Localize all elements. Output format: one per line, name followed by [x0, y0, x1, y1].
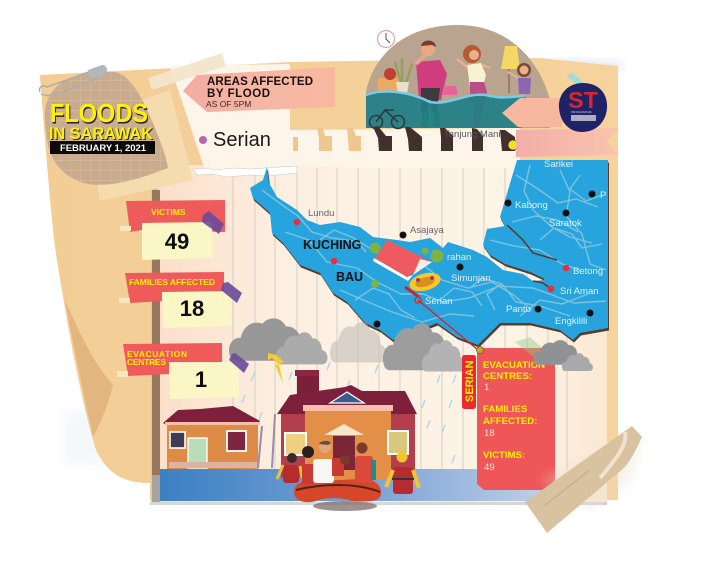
- map labels: Engkilili: [555, 316, 587, 327]
- map labels: Kabong: [515, 200, 548, 211]
- yellow sign: [508, 140, 518, 150]
- tape across top: [148, 53, 226, 90]
- icon: ST logo: [559, 72, 607, 132]
- banner: areas affected: AREAS AFFECTED: [207, 76, 313, 88]
- map of flooded region: BAU: [336, 270, 363, 284]
- bicycle: [370, 110, 404, 128]
- soft page shadows: [62, 60, 622, 470]
- map labels: Sri Aman: [560, 286, 599, 297]
- leader line to Serian card: [418, 300, 478, 350]
- stat: families affected: 18: [180, 296, 204, 321]
- stat: families affected: FAMILIES AFFECTED: [129, 277, 215, 287]
- map labels: Serian: [425, 296, 452, 307]
- map labels: Lundu: [308, 208, 334, 219]
- rivers: [262, 165, 606, 322]
- text: evacuation centres: VICTIMS:: [483, 450, 525, 461]
- map of flooded region: [250, 159, 609, 348]
- icon: flooded hut and rescue boat: [370, 240, 444, 303]
- map labels: Asajaya: [410, 225, 445, 236]
- spiral tabs: dark: [373, 126, 515, 151]
- text: evacuation centres: 18: [484, 428, 495, 439]
- icon: ST logo: ST: [568, 87, 598, 113]
- tape: bottom right corner: [525, 426, 642, 533]
- banner: areas affected: AS OF 5PM: [206, 99, 251, 109]
- banner: areas affected: [183, 67, 335, 112]
- map labels: [308, 159, 606, 327]
- title: Floods in Sarawak: IN SARAWAK: [49, 125, 153, 143]
- title: Floods in Sarawak: [49, 98, 154, 144]
- illustration: large house: [277, 370, 417, 480]
- sticky note behind title: [85, 90, 193, 201]
- spiral tabs: tan: [293, 127, 361, 151]
- lamp: [443, 46, 520, 95]
- title tag: [45, 72, 168, 185]
- stat: victims: VICTIMS: [151, 207, 186, 217]
- map dots: [374, 190, 596, 328]
- icon: safety pin: [39, 65, 107, 96]
- cloud near card: [533, 340, 593, 371]
- child: [508, 63, 531, 94]
- flood water band: [160, 469, 555, 501]
- flood water: [366, 91, 538, 128]
- stat: families affected: [119, 272, 242, 328]
- map of flooded region: KUCHING: [303, 238, 361, 252]
- map labels: Betong: [573, 266, 603, 277]
- tag: SERIAN: [462, 355, 476, 409]
- text: evacuation centres: 1: [484, 382, 489, 393]
- stat: victims: [120, 200, 225, 260]
- plant and box: [378, 58, 412, 94]
- map labels: Pantu: [506, 304, 531, 315]
- stat: evacuation centres: [117, 343, 249, 399]
- map labels: Saratok: [549, 218, 582, 229]
- title: Floods in Sarawak: FLOODS: [51, 100, 149, 130]
- icon: ST logo: INFOGRAPHIC: [571, 110, 593, 114]
- map labels: Simunjan: [451, 273, 491, 284]
- text: evacuation centres: [483, 360, 545, 473]
- icon: gold pin: [476, 346, 484, 354]
- location: Serian: Serian: [213, 129, 271, 151]
- map labels: rahan: [447, 252, 471, 263]
- stat: victims: 49: [165, 229, 189, 254]
- illustration: small house: [163, 406, 275, 469]
- icon: lightning: [268, 353, 284, 383]
- map labels: Sarikei: [544, 159, 573, 170]
- stat: evacuation centres: CENTRES: [127, 357, 166, 367]
- icon: wall clock: [378, 30, 394, 48]
- panel: Serian summary card: [477, 337, 555, 490]
- banner ribbon: [516, 128, 619, 157]
- title: Floods in Sarawak: FLOODS: [50, 98, 148, 128]
- stat: evacuation centres: 1: [195, 367, 207, 392]
- woman: [457, 45, 490, 128]
- illustration: rescuers and rubber boat: [277, 441, 419, 511]
- text: evacuation centres: 49: [484, 462, 495, 473]
- map labels: P: [600, 190, 606, 201]
- panel: notebook paper: [151, 64, 607, 505]
- tag: SERIAN: SERIAN: [464, 360, 476, 402]
- text: evacuation centres: CENTRES:: [483, 371, 532, 382]
- text: evacuation centres: EVACUATION: [483, 360, 545, 371]
- date bar: FEBRUARY 1, 2021: [60, 143, 147, 154]
- panel: brown page spine: [152, 190, 160, 505]
- clouds: [229, 318, 465, 372]
- banner: areas affected: BY FLOOD: [207, 88, 270, 100]
- text: evacuation centres: FAMILIES: [483, 404, 528, 415]
- illustration: family in flooded room: [366, 25, 550, 128]
- banner arrow right: [502, 98, 562, 127]
- stat: evacuation centres: EVACUATION: [127, 349, 187, 359]
- rain: [242, 362, 456, 463]
- label: Tanjung Mani: Tanjung Mani: [444, 129, 501, 140]
- panel: tan backing paper: [40, 58, 618, 500]
- man: [416, 40, 447, 127]
- title: Floods in Sarawak: IN SARAWAK: [50, 126, 154, 144]
- text: evacuation centres: AFFECTED:: [483, 416, 537, 427]
